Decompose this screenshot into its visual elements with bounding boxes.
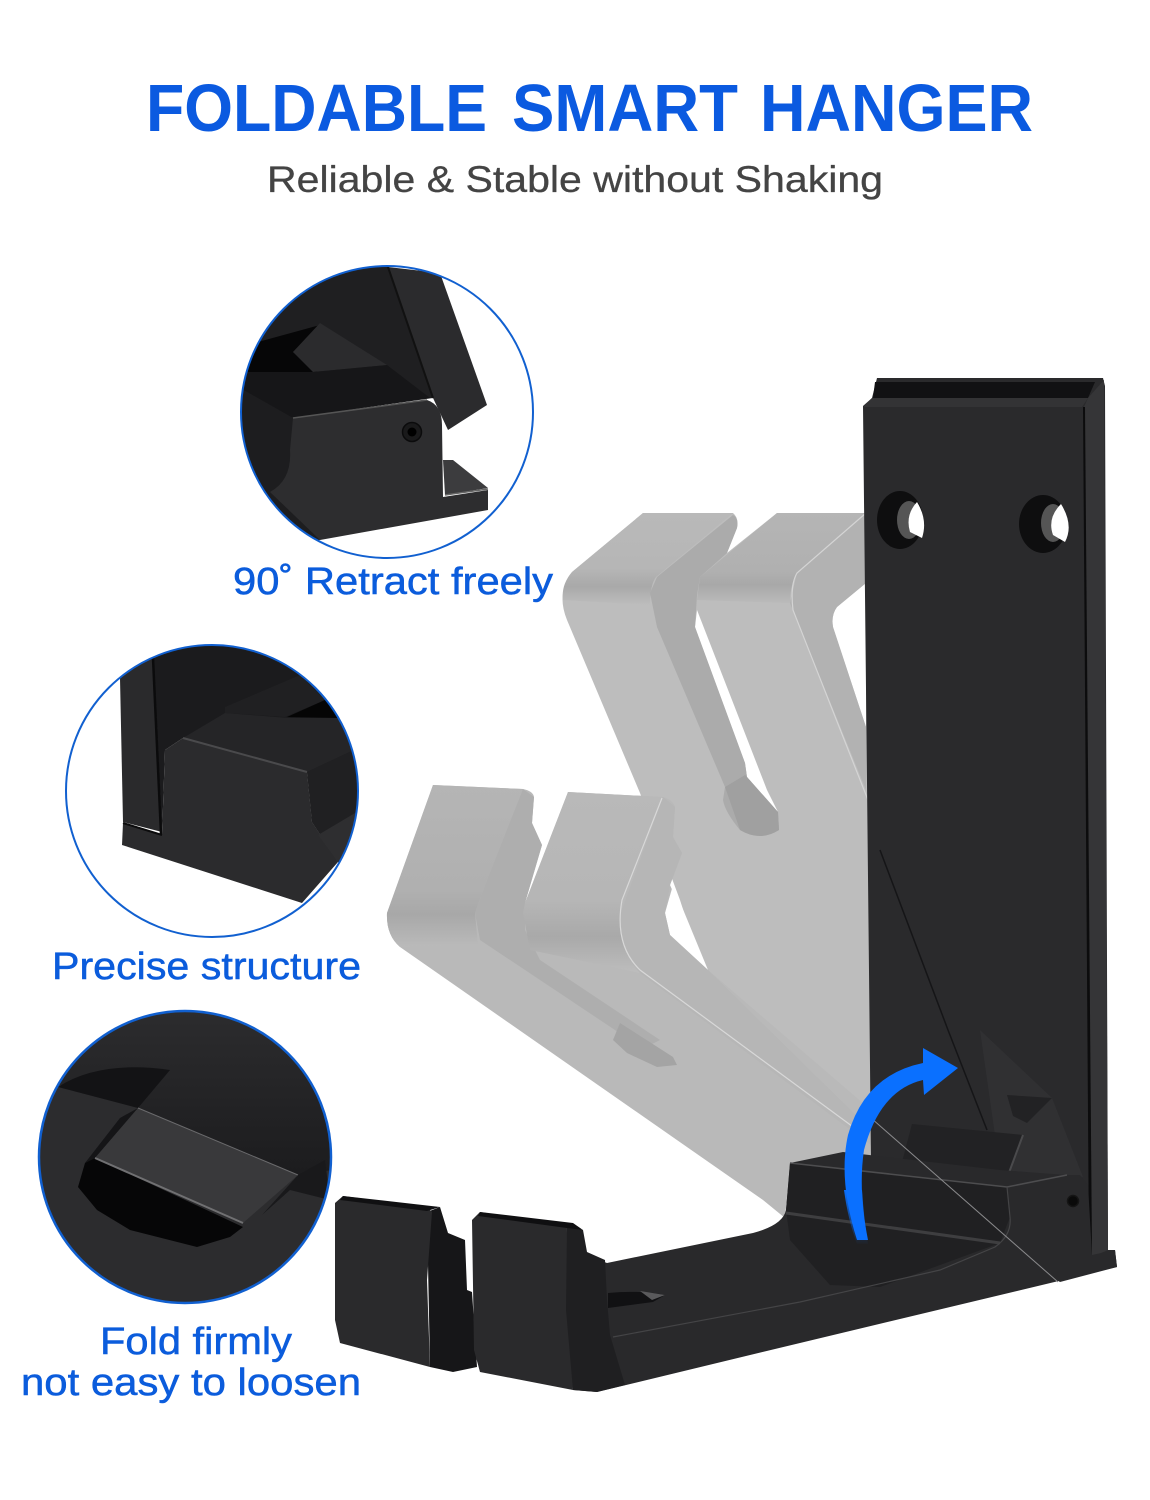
left fork wall	[475, 789, 660, 1050]
cutouts	[832, 583, 866, 727]
label: 90˚ Retract freely	[233, 561, 553, 603]
hook right	[472, 1212, 625, 1392]
right fork wall	[620, 797, 871, 1145]
ghost lower position	[387, 785, 871, 1218]
callout: precise structure	[52, 640, 365, 988]
right fork face band	[523, 792, 663, 973]
detail circle 1	[240, 265, 533, 560]
cutout	[665, 885, 708, 970]
title: FOLDABLE	[146, 71, 487, 146]
label: Precise structure	[52, 946, 361, 988]
ghost upper position	[562, 513, 872, 1150]
left fork inner wall	[650, 515, 779, 836]
back plate	[863, 378, 1117, 1282]
side strip	[1084, 380, 1108, 1257]
mounting hole right	[1019, 495, 1069, 553]
hanger slot	[613, 1023, 677, 1067]
callout: fold firmly	[21, 1010, 361, 1404]
ghost arm lines on plate	[880, 850, 987, 1130]
icon: curved blue arrow	[844, 1048, 958, 1244]
callout: 90 degree retract	[233, 265, 553, 603]
detail circle 2	[66, 640, 365, 937]
step front face	[786, 1163, 1010, 1287]
screw	[1068, 1196, 1078, 1206]
mounting hole left	[877, 491, 924, 549]
subtitle: Reliable & Stable without Shaking	[267, 159, 883, 200]
label	[21, 1321, 361, 1404]
left fork top face	[563, 513, 733, 605]
hook left	[335, 1196, 477, 1372]
detail circle 3	[39, 1010, 333, 1303]
diagonal ghost line	[871, 1118, 1058, 1282]
right fork wall	[790, 513, 866, 790]
hanger product illustration	[335, 378, 1117, 1392]
label: Fold firmly	[100, 1321, 292, 1363]
label: not easy to loosen	[21, 1362, 361, 1404]
top recess	[873, 382, 1095, 398]
title: SMART	[512, 71, 738, 146]
title: HANGER	[760, 71, 1033, 146]
title	[146, 71, 1033, 146]
right fork top face	[697, 513, 866, 603]
left fork face band	[387, 785, 523, 947]
arm slot	[608, 1292, 665, 1308]
front arm	[560, 1118, 1117, 1392]
